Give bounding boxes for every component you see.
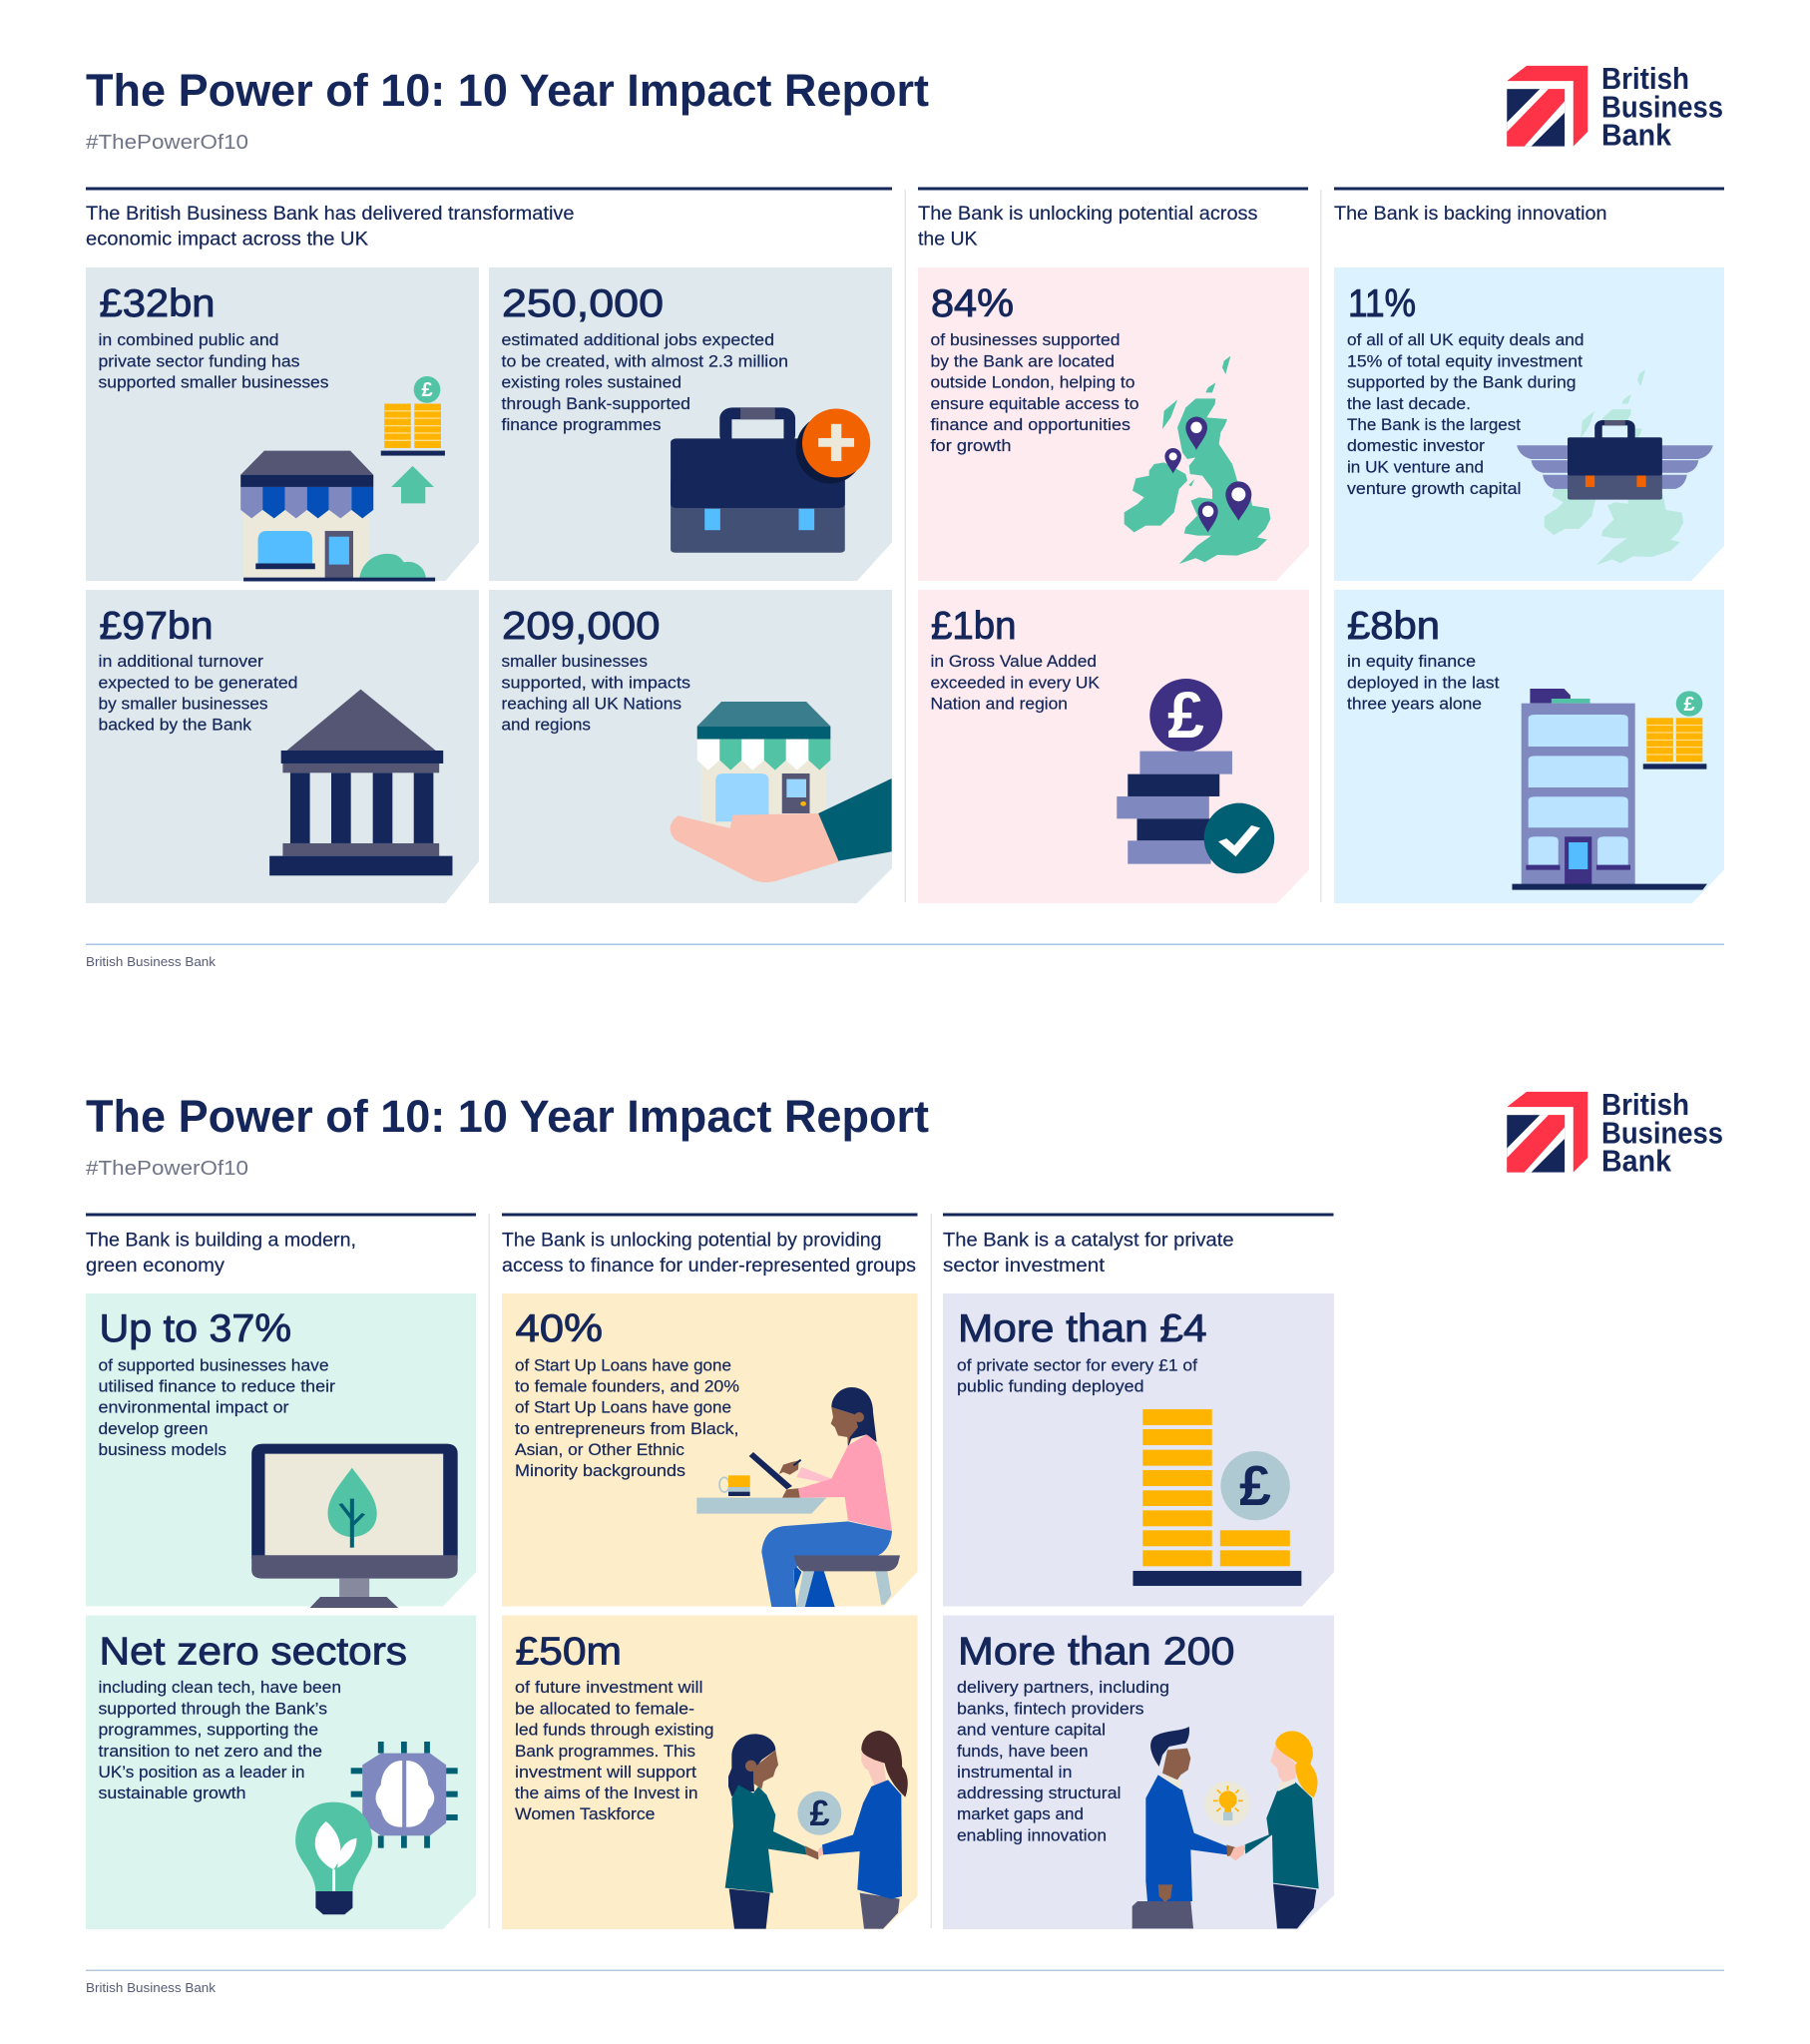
description: including clean tech, have been [98,1679,341,1697]
heading: green economy [86,1230,356,1277]
illustration: coin columns with pound coin: £ [1239,1454,1271,1518]
description: of Start Up Loans have gone [515,1357,731,1375]
illustration: coin stack with tick [1117,678,1274,873]
description [98,653,297,735]
description: supported by the Bank during [1347,373,1577,391]
heading: unlocking potential across the UK: the UK [918,230,978,250]
heading: under-represented groups: The Bank is unlocking potential by providing [502,1230,882,1252]
description: delivery partners, including [957,1679,1169,1697]
description: in equity finance [1347,653,1476,671]
description: market gaps and [957,1805,1084,1823]
description: the last decade. [1347,395,1471,413]
logo: British Business Bank: Bank [1601,118,1672,152]
panel: 84% [918,267,1309,581]
description: of all of all UK equity deals and [1347,331,1584,349]
illustration: office building with coins: £ [1683,694,1695,716]
description [98,1679,341,1802]
description: supported smaller businesses [98,373,329,391]
illustration: winged briefcase [1517,420,1713,500]
heading: backing innovation: The Bank is backing innovation [1334,204,1606,225]
heading: transformative economic impact [86,204,575,250]
illustration: businessman and businesswoman shaking hands [1132,1727,1319,1928]
description: develop green [98,1420,208,1438]
description: Bank programmes. This [515,1743,695,1761]
logo: British Business Bank: Business [1601,90,1723,124]
description: finance and opportunities [930,416,1131,434]
description [515,1357,739,1480]
description [501,653,690,735]
illustration: UK map with location pins [1125,356,1270,564]
description [1347,653,1500,713]
description: through Bank-supported [501,395,690,413]
illustration: briefcase with plus [671,407,870,553]
description: to be created, with almost 2.3 million [501,353,788,371]
illustration: shop with rising coins [240,376,445,581]
description: in UK venture and [1347,459,1484,477]
description: of future investment will [515,1679,702,1697]
heading: catalyst for private investment: The Bank is a catalyst for private [943,1230,1233,1252]
hashtag: #ThePowerOf10 [86,132,248,154]
description: venture growth capital [1347,480,1521,498]
description: supported, with impacts [501,675,690,693]
illustration: office building with coins [1512,689,1707,890]
description: to entrepreneurs from Black, [515,1420,738,1438]
description: supported through the Bank’s [98,1701,327,1719]
description [515,1679,714,1823]
description: instrumental in [957,1764,1072,1782]
panel: £8bn [1334,590,1724,903]
illustration: hand holding shop [671,702,892,882]
description: sustainable growth [98,1785,245,1802]
logo: British Business Bank: Business [1601,1116,1723,1150]
panel: 40% [502,1293,918,1607]
description: enabling innovation [957,1826,1107,1844]
stat: £1bn [931,605,1016,648]
description: of businesses supported [930,331,1120,349]
description: deployed in the last [1347,675,1500,693]
stat: 84% [931,282,1014,325]
illustration: faded UK map [1545,369,1683,565]
description: domestic investor [1347,437,1486,455]
description: business models [98,1441,226,1459]
description: be allocated to female- [515,1701,694,1719]
stat: More than 200 [958,1631,1235,1673]
description [1347,331,1584,498]
illustration: coin stack with tick: £ [1167,678,1204,752]
description: finance programmes [501,416,661,434]
description [957,1679,1169,1844]
heading: under-represented groups [502,1230,916,1277]
logo: British Business Bank [1507,1087,1723,1178]
panel: Up to 37% [86,1293,476,1608]
stat: £8bn [1347,605,1440,648]
panel: £50m [502,1615,918,1929]
stat: Up to 37% [100,1307,291,1350]
description [930,331,1139,455]
description: addressing structural [957,1785,1122,1802]
description: estimated additional jobs expected [501,331,774,349]
stat: 209,000 [502,605,661,648]
description: The Bank is the largest [1347,416,1521,434]
stat: More than £4 [958,1307,1207,1350]
panel: £1bn [918,590,1309,903]
stat: 11% [1348,282,1416,325]
description: in Gross Value Added [930,653,1097,671]
illustration: chip brain and leaf bulb [295,1742,458,1914]
footer text page two: British Business Bank [86,1980,217,1995]
description: for growth [930,437,1012,455]
panel: 209,000 [489,590,892,903]
panel: £97bn [86,590,479,903]
description: to female founders, and 20% [515,1377,739,1395]
logo: British Business Bank: British [1601,1087,1689,1122]
description: Minority backgrounds [515,1462,685,1480]
stat: Net zero sectors [100,1631,407,1673]
description: banks, fintech providers [957,1701,1143,1719]
description: in additional turnover [98,653,264,671]
stat: £50m [515,1631,622,1673]
heading: catalyst for private investment: sector investment [943,1256,1106,1277]
panel: Net zero sectors [86,1615,476,1929]
illustration: two women shaking hands: £ [809,1792,830,1833]
description: in combined public and [98,331,279,349]
description [930,653,1100,713]
description: backed by the Bank [98,717,252,735]
heading: unlocking potential across the UK: The Bank is unlocking potential across [918,204,1257,225]
description: utilised finance to reduce their [98,1377,336,1395]
description: led funds through existing [515,1721,714,1739]
description: 15% of total equity investment [1347,353,1583,371]
hashtag: #ThePowerOf10 [86,1158,248,1180]
description: of supported businesses have [98,1357,329,1375]
stat: £97bn [100,605,214,648]
description: smaller businesses [501,653,648,671]
description: environmental impact or [98,1399,289,1417]
description: private sector funding has [98,353,299,371]
heading: catalyst for private investment [943,1230,1233,1277]
stat: 40% [515,1307,603,1350]
illustration: shop with rising coins: £ [421,379,433,401]
description: existing roles sustained [501,373,681,391]
description: and regions [501,717,591,735]
logo: British Business Bank: Bank [1601,1144,1672,1178]
description: by smaller businesses [98,695,267,713]
heading: green economy: The Bank is building a modern, [86,1230,356,1252]
description: and venture capital [957,1721,1106,1739]
description [501,331,788,434]
description [98,331,329,391]
panel: 11% [1334,267,1724,581]
stat: £32bn [100,282,216,325]
description: public funding deployed [957,1377,1143,1395]
title: report page one: The Power of 10: 10 Year Impact Report [86,65,929,116]
illustration: bank building [269,690,452,875]
panel: More than 200 [943,1615,1334,1929]
description: of Start Up Loans have gone [515,1399,731,1417]
description: expected to be generated [98,675,297,693]
stat: 250,000 [502,282,664,325]
panel: 250,000 [489,267,892,581]
panel: £32bn [86,267,479,581]
description: investment will support [515,1764,696,1782]
description [957,1357,1197,1395]
description: Women Taskforce [515,1805,655,1823]
footer text page one: British Business Bank [86,954,217,969]
description: ensure equitable access to [930,395,1139,413]
description: Asian, or Other Ethnic [515,1441,684,1459]
description: outside London, helping to [930,373,1135,391]
heading: transformative economic impact: economic impact across the UK [86,230,368,250]
heading: unlocking potential across the UK [918,204,1257,250]
description: transition to net zero and the [98,1743,322,1761]
heading: transformative economic impact: The British Business Bank has delivered transformative [86,204,575,225]
illustration: monitor with leaf [251,1444,458,1608]
panel: More than £4 [943,1293,1334,1607]
description [98,1357,336,1459]
description: reaching all UK Nations [501,695,681,713]
description: funds, have been [957,1743,1088,1761]
illustration: woman working at table with tablet [696,1387,900,1607]
heading: green economy: green economy [86,1256,226,1277]
description: UK’s position as a leader in [98,1764,305,1782]
description: three years alone [1347,695,1482,713]
description: exceeded in every UK [930,675,1100,693]
description: of private sector for every £1 of [957,1357,1197,1375]
logo: British Business Bank: British [1601,61,1689,96]
description: the aims of the Invest in [515,1785,698,1802]
illustration: two women shaking hands [725,1731,908,1929]
description: programmes, supporting the [98,1721,318,1739]
illustration: coin columns with pound coin [1132,1409,1301,1586]
heading: under-represented groups: access to finance for under-represented groups [502,1256,916,1277]
description: by the Bank are located [930,353,1115,371]
logo: British Business Bank [1507,61,1723,152]
title: report page two: The Power of 10: 10 Year Impact Report [86,1091,929,1142]
description: Nation and region [930,695,1068,713]
